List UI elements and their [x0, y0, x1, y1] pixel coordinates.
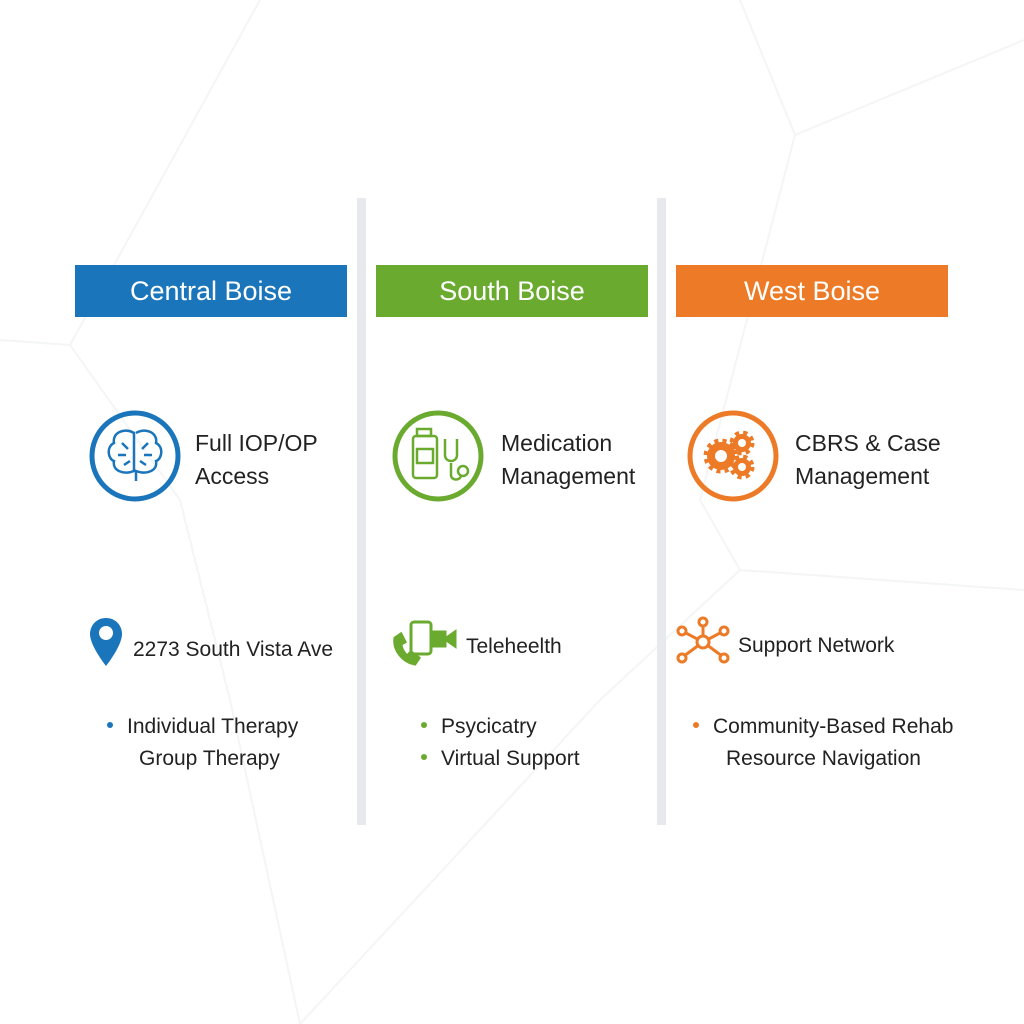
header: West Boise: West Boise [744, 276, 880, 306]
list: Central [107, 715, 298, 770]
text: CBRS & Case Management [795, 430, 941, 489]
text: CBRS & Case Management: CBRS & Case [795, 430, 941, 456]
divider [357, 198, 366, 825]
header: South Boise: South Boise [439, 276, 585, 306]
text: Teleheelth: Teleheelth [466, 635, 562, 658]
list: South [421, 715, 580, 770]
icon: location pin [90, 618, 122, 666]
divider [657, 198, 666, 825]
list: South: Virtual Support [441, 747, 580, 770]
icon: telehealth [393, 620, 456, 666]
text: Medication Management: Medication [501, 430, 612, 456]
text: CBRS & Case Management: Management [795, 463, 929, 489]
text: Medication Management: Management [501, 463, 635, 489]
list: Central: Individual Therapy [127, 715, 298, 738]
list: Central: Group Therapy [139, 747, 280, 770]
list: West: Community-Based Rehab [713, 715, 953, 738]
header: West Boise [676, 265, 948, 317]
icon: medication [392, 410, 484, 502]
list: West: Resource Navigation [726, 747, 921, 770]
icon: network [676, 616, 730, 664]
header: Central Boise: Central Boise [130, 276, 292, 306]
text: address: 2273 South Vista Ave [133, 638, 333, 661]
list: West [693, 715, 953, 770]
icon: brain [90, 410, 180, 502]
header: Central Boise [75, 265, 347, 317]
text: Full IOP/OP Access: Access [195, 463, 269, 489]
text: Full IOP/OP Access [195, 430, 318, 489]
list: South: Psycicatry [441, 715, 537, 738]
text: Support Network: Support Network [738, 634, 894, 657]
text: Medication Management [501, 430, 636, 489]
icon: gears [688, 410, 778, 502]
text: Full IOP/OP Access: Full IOP/OP [195, 430, 318, 456]
header: South Boise [376, 265, 648, 317]
